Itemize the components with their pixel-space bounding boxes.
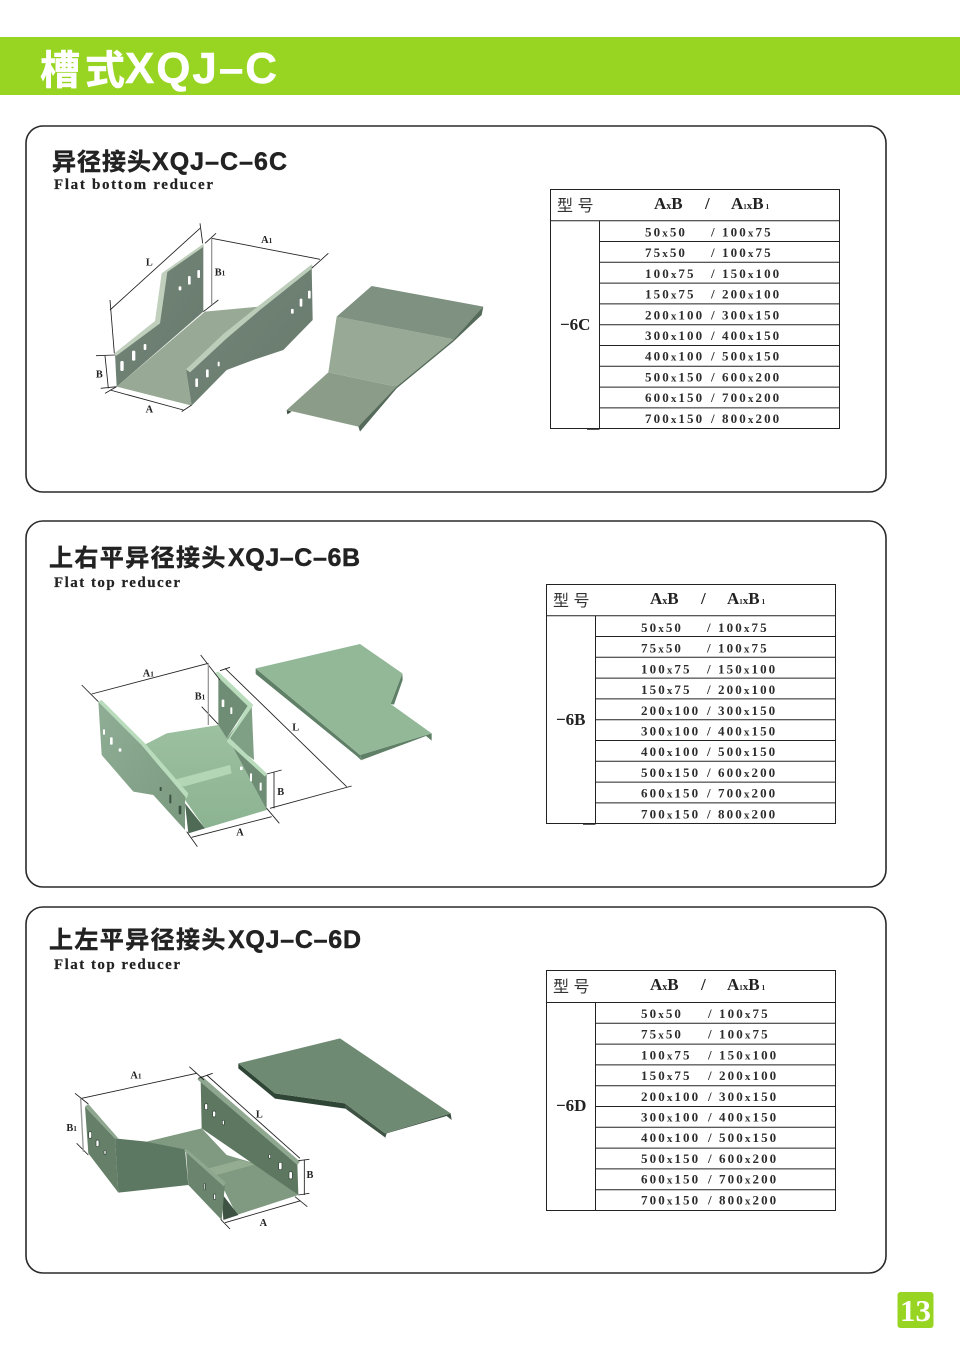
table: 6C sizes: / 700x200 (710, 390, 781, 405)
table: 6C sizes: 50x50 (645, 224, 687, 240)
table: 6B sizes: / 500x150 (706, 744, 777, 759)
table: 6C sizes: 200x100 (645, 307, 704, 322)
table: 6B sizes: 150x75 (641, 682, 692, 697)
table: 6D sizes: / 500x150 (707, 1130, 778, 1145)
table: 6C sizes: AxB (654, 194, 683, 213)
table: 6C sizes: / 500x150 (710, 349, 781, 364)
table: 6B sizes: / 600x200 (706, 765, 777, 780)
panel: flat top reducer 6D (26, 907, 886, 1273)
table: 6D sizes: 200x100 (641, 1089, 700, 1104)
table: 6D sizes: 100x75 (641, 1047, 692, 1062)
lid: 6D (238, 1038, 452, 1139)
table: 6D sizes: −6D (556, 1096, 586, 1115)
table: 6B sizes: 75x50 (641, 641, 683, 656)
diagram: flat bottom reducer tray: L (146, 257, 153, 268)
table: 6B sizes: / (700, 589, 706, 608)
table: 6D sizes: AxB (650, 975, 679, 994)
table: 6B sizes: 100x75 (641, 661, 692, 676)
table: 6B sizes: / 100x75 (706, 620, 769, 635)
heading: 6C: 异径接头 (52, 149, 152, 176)
lid: 6B (256, 644, 432, 761)
diagram: flat top reducer tray 6D: A (260, 1218, 268, 1229)
main title (40, 44, 277, 93)
heading: 6C: XQJ–C–6C (152, 148, 287, 176)
table: 6D sizes: / 600x200 (707, 1151, 778, 1166)
table: 6C sizes: / 200x100 (710, 287, 781, 302)
diagram: flat top reducer tray 6B: B1 (195, 692, 206, 703)
table: 6C sizes: 300x100 (645, 328, 704, 343)
main title: XQJ–C (125, 44, 277, 93)
table: 6B sizes: 400x100 (641, 744, 700, 759)
table: 6C sizes: 600x150 (645, 390, 704, 405)
table: 6C sizes: / 400x150 (710, 328, 781, 343)
table: 6C sizes: 100x75 (645, 266, 696, 281)
table: 6D sizes: / 400x150 (707, 1110, 778, 1124)
table: 6D sizes: 600x150 (641, 1172, 700, 1187)
diagram: flat top reducer tray 6D: B1 (66, 1123, 77, 1134)
table: 6C sizes: 700x150 (645, 411, 704, 426)
subtitle: 6C: Flat bottom reducer (54, 177, 213, 193)
table: 6C sizes: / 100x75 (710, 245, 773, 260)
table: 6B sizes: −6B (556, 710, 586, 729)
diagram: flat top reducer tray 6D: B (307, 1170, 314, 1181)
diagram: flat bottom reducer tray: A (146, 405, 154, 416)
heading: 6B (49, 544, 360, 572)
heading: 6D: XQJ–C–6D (228, 926, 361, 954)
table: 6B sizes: 型 号 (553, 592, 589, 610)
table: 6C sizes: 500x150 (645, 369, 704, 384)
table: 6C sizes: 75x50 (645, 245, 687, 260)
table: 6C sizes: / 600x200 (710, 369, 781, 384)
heading: 6D: 上左平异径接头 (49, 927, 227, 954)
diagram: flat top reducer tray 6D: L (256, 1110, 263, 1121)
table: 6B sizes: 600x150 (641, 786, 700, 801)
table: 6B sizes: 700x150 (641, 806, 700, 821)
table: 6D sizes: 700x150 (641, 1192, 700, 1207)
table: 6D sizes: / 100x75 (707, 1027, 770, 1042)
panel: flat top reducer 6B (26, 521, 886, 887)
panel: flat bottom reducer (26, 126, 886, 492)
table: 6B sizes: 500x150 (641, 765, 700, 780)
table: 6C sizes: A1xB 1 (731, 194, 770, 213)
main title: 槽式 (40, 49, 130, 93)
table: 6C sizes: / 150x100 (710, 266, 781, 281)
subtitle: 6D: Flat top reducer (54, 957, 180, 973)
table: 6B sizes: / 800x200 (706, 806, 777, 821)
table: 6B sizes: AxB (650, 589, 679, 608)
table: 6B sizes: 50x50 (641, 620, 683, 635)
table: 6C sizes: 型 号 (557, 197, 593, 215)
table: 6B sizes: / 700x200 (706, 786, 777, 801)
table: 6D sizes: 500x150 (641, 1151, 700, 1166)
table: 6D sizes: 400x100 (641, 1130, 700, 1145)
table: 6B sizes: / 300x150 (706, 703, 777, 718)
heading: 6B: 上右平异径接头 (49, 545, 227, 572)
table: 6D sizes: / 800x200 (707, 1192, 778, 1207)
diagram: flat bottom reducer tray: B1 (215, 267, 226, 278)
table: 6B sizes: A1xB 1 (727, 589, 766, 608)
diagram: flat top reducer tray 6B: A1 (143, 668, 154, 679)
table: 6B sizes: 200x100 (641, 703, 700, 718)
table: 6C sizes: / 100x75 (710, 224, 773, 240)
diagram: flat bottom reducer tray (96, 223, 483, 432)
diagram: flat top reducer tray 6B: L (292, 723, 299, 734)
table: 6C sizes: 150x75 (645, 287, 696, 302)
diagram: flat top reducer tray 6B: A (236, 828, 244, 839)
diagram: flat bottom reducer tray: B (96, 370, 103, 381)
diagram: flat top reducer tray 6B (82, 644, 432, 847)
table: 6B sizes: / 400x150 (706, 724, 777, 738)
table: 6B sizes: / 200x100 (706, 682, 777, 697)
lid: flat bottom reducer (287, 286, 483, 432)
heading: 6D (49, 926, 361, 954)
table: 6D sizes: / 200x100 (707, 1068, 778, 1083)
table: 6D sizes: 50x50 (641, 1006, 683, 1021)
table: 6D sizes: 75x50 (641, 1027, 683, 1042)
diagram: flat bottom reducer tray: A1 (261, 235, 273, 246)
table: 6C sizes: / 300x150 (710, 307, 781, 322)
table: 6C sizes: 400x100 (645, 349, 704, 364)
table: 6D sizes: 300x100 (641, 1110, 700, 1124)
table: 6B sizes (546, 584, 836, 824)
diagram: flat top reducer tray 6B: B (277, 787, 284, 798)
subtitle: 6B: Flat top reducer (54, 575, 180, 591)
table: 6D sizes: 型 号 (553, 978, 589, 996)
table: 6D sizes: / 300x150 (707, 1089, 778, 1104)
table: 6B sizes: / 150x100 (706, 661, 777, 676)
table: 6B sizes: / 100x75 (706, 641, 769, 656)
table: 6D sizes: / 150x100 (707, 1047, 778, 1062)
table: 6B sizes: 300x100 (641, 724, 700, 738)
heading: 6B: XQJ–C–6B (228, 544, 360, 572)
diagram: flat top reducer tray 6D (66, 1038, 452, 1229)
page number: 13 (900, 1293, 931, 1328)
table: 6C sizes: / 800x200 (710, 411, 781, 426)
heading: 6C (52, 148, 287, 176)
table: 6D sizes: / (700, 975, 706, 994)
title band (0, 37, 960, 95)
table: 6D sizes: 150x75 (641, 1068, 692, 1083)
diagram: flat top reducer tray 6D: A1 (130, 1071, 142, 1082)
table: 6D sizes: / 100x75 (707, 1006, 770, 1021)
table: 6C sizes (550, 190, 840, 429)
table: 6D sizes (546, 970, 836, 1210)
table: 6D sizes: A1xB 1 (727, 975, 766, 994)
table: 6C sizes: / (704, 194, 710, 213)
table: 6C sizes: −6C (560, 315, 590, 334)
table: 6D sizes: / 700x200 (707, 1172, 778, 1187)
